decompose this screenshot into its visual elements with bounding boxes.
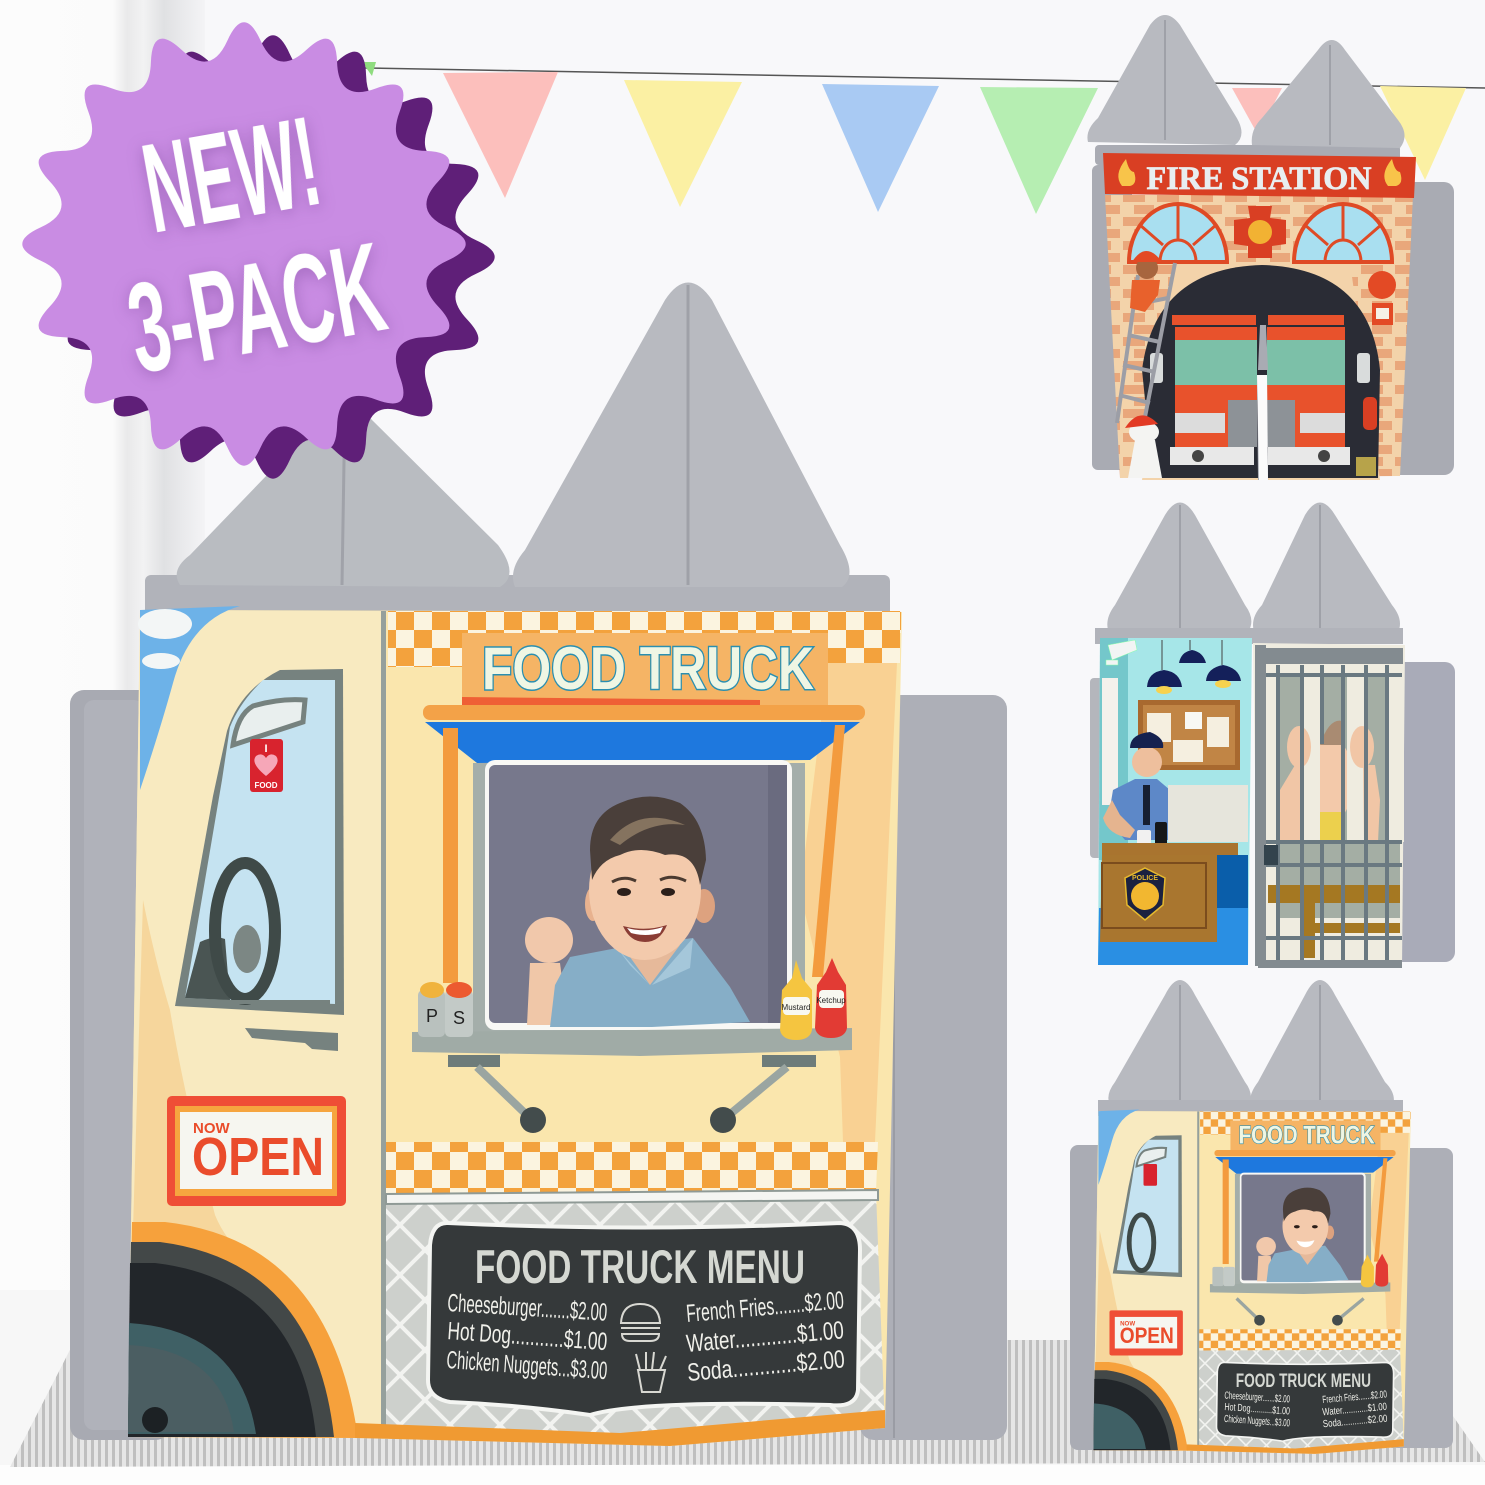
pillows and cushions — [1090, 502, 1455, 962]
badge face — [22, 22, 466, 466]
small banner: OPEN — [1120, 1323, 1174, 1348]
banner cloth — [128, 610, 902, 1446]
bunting string and flags — [362, 62, 1485, 214]
pillows and cushions — [1087, 15, 1454, 475]
hanging tag: I — [264, 743, 268, 755]
tile panel — [355, 1192, 885, 1446]
icon: fries — [636, 1352, 666, 1392]
cab window — [175, 669, 344, 1051]
boots — [1356, 457, 1376, 476]
small food truck fort — [1070, 980, 1453, 1454]
small banner: Water............$1.00 — [1322, 1402, 1388, 1418]
chalk menu: Water............$1.00 — [685, 1316, 845, 1358]
cream strips — [1303, 676, 1404, 842]
now open sign: OPEN — [192, 1127, 324, 1187]
header band — [1103, 153, 1416, 198]
chalk menu: FOOD TRUCK MENU — [475, 1240, 805, 1293]
pillows and cushions — [1070, 980, 1453, 1450]
small banner — [1093, 1109, 1411, 1454]
lower checker band — [386, 1142, 878, 1194]
small banner: French Fries.......$2.00 — [1322, 1389, 1388, 1406]
chalk menu: Chicken Nuggets...$3.00 — [446, 1346, 608, 1385]
truck divider — [381, 611, 386, 1438]
door split — [1257, 325, 1268, 480]
small banner: FOOD TRUCK MENU — [1236, 1371, 1371, 1392]
badge shadow — [51, 35, 495, 479]
wheel and orange arch — [128, 1222, 358, 1438]
counter and condiments: P — [426, 1006, 438, 1026]
cloth — [1105, 195, 1413, 478]
small banner: Soda............$2.00 — [1322, 1414, 1388, 1430]
top checker border — [388, 611, 901, 667]
officer — [1103, 732, 1170, 846]
fire bell and alarm box — [1368, 271, 1396, 325]
now open sign — [167, 1096, 346, 1206]
fire station fort — [1087, 15, 1454, 480]
child — [525, 796, 750, 1027]
counter and condiments: S — [453, 1008, 465, 1028]
badge text: 3-pack: 3-PACK — [118, 215, 395, 400]
desk — [1100, 843, 1238, 942]
arched windows — [1129, 204, 1392, 262]
counter and condiments — [412, 958, 852, 1133]
small banner: NOW — [1120, 1321, 1135, 1328]
small banner: Chicken Nuggets...$3.00 — [1224, 1414, 1290, 1429]
main food truck banner — [128, 606, 902, 1446]
ladder and firefighter — [1117, 251, 1175, 423]
cab peach shading — [132, 900, 250, 1262]
badge text: new: NEW! — [133, 89, 330, 260]
police office panel — [1098, 638, 1252, 965]
counter and condiments: Mustard — [782, 1003, 810, 1012]
police station fort — [1090, 502, 1455, 968]
main fort cushions and pillows — [70, 282, 1007, 1440]
jail cell panel — [1253, 643, 1405, 968]
rug — [10, 1340, 1485, 1467]
arch — [1142, 265, 1380, 478]
fire extinguisher — [1363, 397, 1377, 430]
serving window frame — [473, 760, 805, 1033]
small banner: FOOD TRUCK — [1239, 1122, 1375, 1149]
fire department emblem — [1234, 206, 1286, 258]
chalk menu: Hot Dog...........$1.00 — [447, 1317, 608, 1356]
now open sign: NOW — [193, 1120, 230, 1137]
hanging tag — [250, 739, 283, 792]
child arms — [1279, 726, 1380, 842]
badge: new 3-pack — [22, 22, 495, 479]
counter and condiments: Ketchup — [816, 996, 846, 1005]
header band: FIRE STATION — [1146, 161, 1372, 197]
fire truck — [1150, 315, 1370, 465]
icon: burger — [621, 1304, 660, 1341]
sky corner with clouds — [138, 606, 240, 790]
keyhole — [1264, 845, 1278, 865]
computer — [1168, 785, 1248, 842]
small banner cloth — [1093, 1111, 1411, 1454]
right peach panel — [800, 663, 897, 1142]
awning posts — [443, 725, 845, 983]
sign: food truck: FOOD TRUCK — [482, 635, 814, 702]
chalk menu: Cheeseburger.......$2.00 — [447, 1289, 608, 1327]
police badge: POLICE — [1132, 875, 1158, 882]
awning — [423, 697, 865, 763]
small banner: Hot Dog...........$1.00 — [1224, 1402, 1290, 1418]
child behind bars — [1309, 721, 1353, 844]
small banner: Cheeseburger.......$2.00 — [1224, 1391, 1290, 1406]
ceiling lamps — [1147, 640, 1241, 694]
cab panel — [128, 610, 383, 1438]
orange hem — [355, 1410, 885, 1446]
bench — [1268, 885, 1400, 958]
chalk menu — [428, 1223, 860, 1415]
corkboard — [1138, 700, 1240, 770]
chalk menu: French Fries.......$2.00 — [685, 1286, 845, 1328]
security camera — [1106, 640, 1137, 665]
hanging tag: FOOD — [254, 781, 278, 790]
bars — [1255, 645, 1403, 968]
dalmatian — [1125, 415, 1162, 478]
chalk menu: Soda............$2.00 — [686, 1345, 846, 1387]
